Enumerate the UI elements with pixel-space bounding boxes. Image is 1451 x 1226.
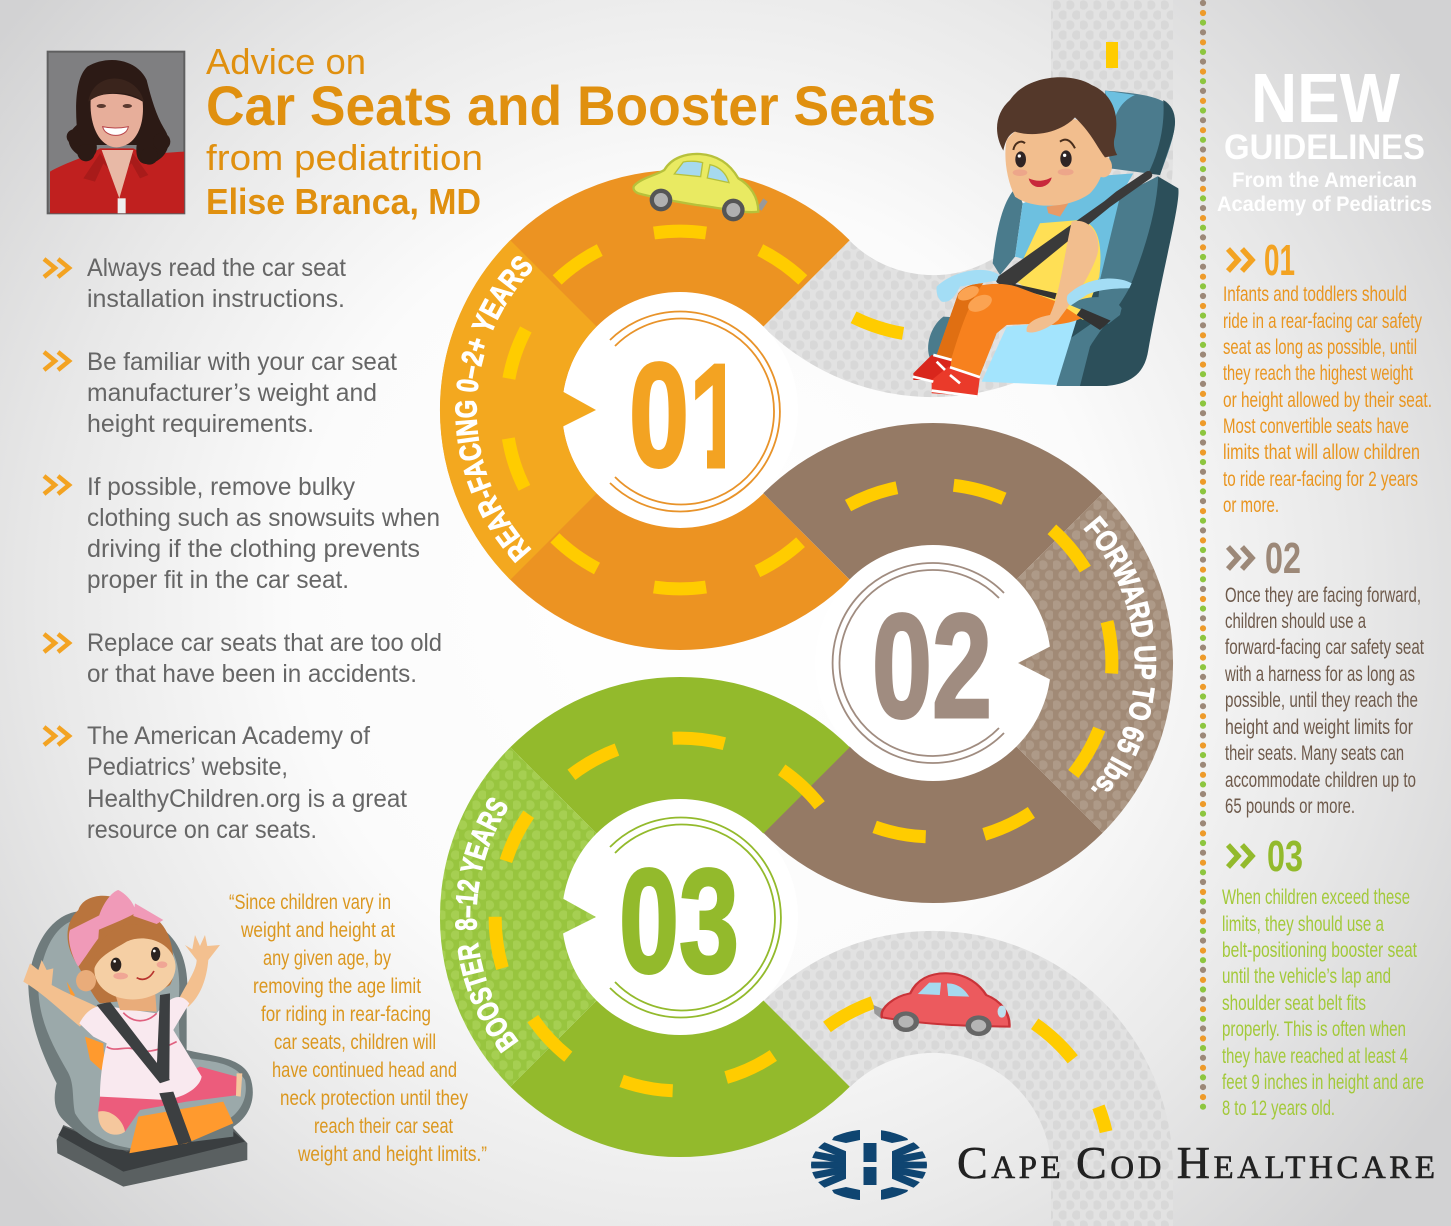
guideline 03 heading: 03 [1267,832,1303,881]
tip 5 [44,722,407,844]
heading: new guidelines [1217,59,1432,216]
legs [937,283,1082,377]
number badge 03: 03 [619,839,739,1004]
tip 5: Pediatrics’ website, [87,753,288,781]
tip 4 [44,629,442,688]
tip 5: resource on car seats. [87,816,317,844]
guideline 01 [1223,236,1432,517]
shirt and belt [1000,175,1148,320]
road ring 02: forward-facing [766,443,1174,882]
guideline 02: 65 pounds or more. [1225,795,1355,818]
pull quote: weight and height at [240,919,395,942]
tip 3: clothing such as snowsuits when [87,504,440,532]
guideline 02 heading: 02 [1265,534,1301,583]
tip 2: height requirements. [87,410,314,438]
guideline 02 [1224,534,1424,818]
number badge 02 [833,563,1004,763]
tip 3: driving if the clothing prevents [87,535,420,563]
number badge 01: 0 [629,333,689,498]
pull quote: have continued head and [272,1059,457,1082]
tip 1 [44,254,346,313]
tip 3 [44,473,440,594]
number badge 01 [610,311,780,511]
title: Car Seats and Booster Seats [206,74,936,137]
tip 4: or that have been in accidents. [87,660,417,688]
pull quote: reach their car seat [314,1115,453,1138]
title: Elise Branca, MD [206,181,481,222]
tip 2: Be familiar with your car seat [87,348,397,376]
tip 2: manufacturer’s weight and [87,379,377,407]
guideline 01 heading [1228,236,1295,285]
guideline 03: limits, they should use a [1222,913,1384,936]
cushion [67,982,233,1153]
icon: yellow car [633,154,768,221]
road ring 01: rear-facing [440,190,847,630]
pull quote: any given age, by [263,947,391,970]
guideline 03: shoulder seat belt fits [1222,992,1366,1015]
armrests [937,270,1132,330]
illustration: boy in car seat [913,77,1179,397]
heading: new guidelines: From the American [1232,169,1417,192]
road: grey top segment [806,0,1118,336]
number badge 01: 1 [689,334,748,499]
road: grey bottom segment [806,992,1112,1226]
pull quote: removing the age limit [253,975,421,998]
title [206,41,936,222]
ring 01 label: REAR-FACING 0–2+ YEARS [454,256,532,564]
pull quote: for riding in rear-facing [261,1003,431,1026]
tips list [44,254,442,844]
pull quote [229,891,487,1166]
logo wordmark: CAPE COD HEALTHCARE [957,1137,1435,1188]
icon: red car [874,973,1009,1036]
title: Advice on [206,41,366,82]
head and hair [67,896,174,1003]
logo: Cape Cod Healthcare mark [811,1130,927,1200]
tip 2 [44,348,397,438]
tip 1: installation instructions. [87,285,345,313]
guideline 03 heading [1228,832,1303,881]
head [997,77,1117,217]
tip 3: If possible, remove bulky [87,473,355,501]
pull quote: car seats, children will [274,1031,436,1054]
number badge 02: 02 [872,584,992,749]
title: from pediatrition [206,137,483,178]
road ring 03: booster [440,696,850,1136]
arm [1027,221,1098,333]
guideline 03: 8 to 12 years old. [1222,1097,1335,1120]
legs [98,1067,238,1133]
dotted divider [1200,3,1206,1112]
heading: new guidelines: Academy of Pediatrics [1217,193,1432,216]
guideline 02 heading [1228,534,1301,583]
pull quote: “Since children vary in [229,891,391,914]
left arm [23,960,97,1027]
harness [97,993,192,1145]
seat [928,91,1179,386]
right arm [177,935,220,1007]
dress [79,997,202,1100]
illustration: girl in car seat [23,890,253,1187]
ring 02 label: FORWARD UP TO 65 lbs. [1084,515,1156,792]
tip 1: Always read the car seat [87,254,346,282]
guideline 01: or more. [1223,494,1279,517]
tip 5: The American Academy of [87,722,370,750]
tip 4: Replace car seats that are too old [87,629,442,657]
tip 5: HealthyChildren.org is a great [87,785,407,813]
seat shell [28,912,253,1150]
guideline 01 heading: 01 [1264,236,1295,285]
ring 03 label: BOOSTER 8–12 YEARS [455,798,519,1054]
portrait photo: Elise Branca [48,52,184,213]
hair bow [69,890,163,967]
guideline 03: until the vehicle’s lap and [1222,965,1391,988]
tip 3: proper fit in the car seat. [87,566,349,594]
seat base [57,1125,247,1187]
heading: new guidelines: GUIDELINES [1224,128,1425,167]
heading: new guidelines: NEW [1251,59,1400,137]
guideline 02: children should use a [1225,610,1366,633]
shoes [913,355,980,397]
pull quote: neck protection until they [280,1087,468,1110]
pull quote: weight and height limits.” [297,1143,487,1166]
guideline 03 [1222,832,1424,1120]
